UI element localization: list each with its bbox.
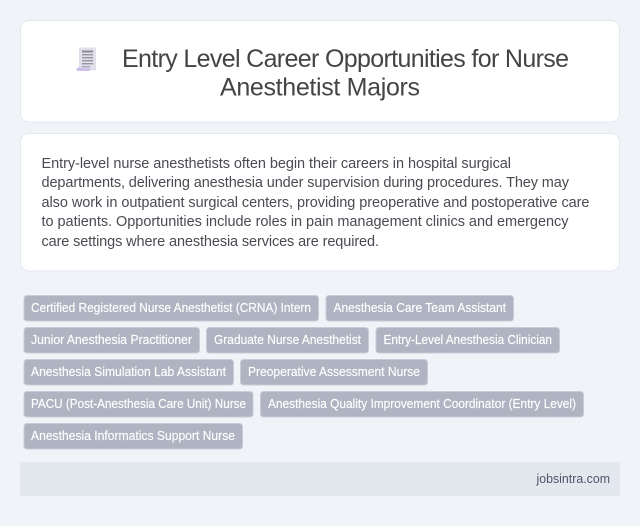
panel: description	[20, 134, 620, 271]
tag: informatics support nurse: Anesthesia Informatics Support Nurse	[31, 429, 235, 443]
title: Entry Level Career Opportunities for Nurse	[122, 45, 569, 73]
tag: simulation lab assistant: Anesthesia Simulation Lab Assistant	[31, 365, 227, 379]
text block: description: to patients. Opportunities include roles in pain management clinics and emergency	[42, 214, 569, 230]
panel: header	[20, 20, 620, 122]
tag list	[24, 296, 584, 449]
tag: PACU nurse: PACU (Post-Anesthesia Care Unit) Nurse	[31, 397, 246, 411]
tag: quality improvement coordinator	[260, 392, 584, 417]
tag: junior practitioner: Junior Anesthesia Practitioner	[31, 333, 192, 347]
icon: paper scroll	[76, 48, 96, 71]
footer source text: jobsintra.com	[536, 472, 610, 486]
tag: CRNA intern	[24, 296, 318, 321]
tag: PACU nurse	[24, 392, 253, 417]
tag: care team assistant: Anesthesia Care Team Assistant	[334, 301, 506, 315]
text block: description: also work in outpatient surgical centers, providing preoperative and postoperative care	[42, 195, 590, 211]
tag: graduate nurse anesthetist	[206, 328, 368, 353]
tag: informatics support nurse	[24, 424, 242, 449]
tag: entry-level clinician	[376, 328, 560, 353]
title	[122, 45, 569, 102]
text block: description: Entry-level nurse anesthetists often begin their careers in hospital surgical	[42, 156, 511, 172]
tag: entry-level clinician: Entry-Level Anesthesia Clinician	[384, 333, 552, 347]
tag: preoperative nurse	[240, 360, 428, 385]
tag: graduate nurse anesthetist: Graduate Nurse Anesthetist	[214, 333, 362, 347]
text block: description	[42, 156, 590, 250]
tag: care team assistant	[326, 296, 514, 321]
text block: description: care settings where anesthesia services are required.	[42, 234, 379, 250]
tag: CRNA intern: Certified Registered Nurse Anesthetist (CRNA) Intern	[31, 301, 311, 315]
tag: junior practitioner	[24, 328, 200, 353]
tag: simulation lab assistant	[24, 360, 234, 385]
title: Anesthetist Majors	[220, 74, 420, 102]
footer	[20, 462, 620, 496]
tag: quality improvement coordinator: Anesthesia Quality Improvement Coordinator (Entry Level)	[268, 397, 576, 411]
text block: description: departments, delivering anesthesia under supervision during procedures. They may	[42, 175, 570, 191]
tag: preoperative nurse: Preoperative Assessment Nurse	[248, 365, 420, 379]
